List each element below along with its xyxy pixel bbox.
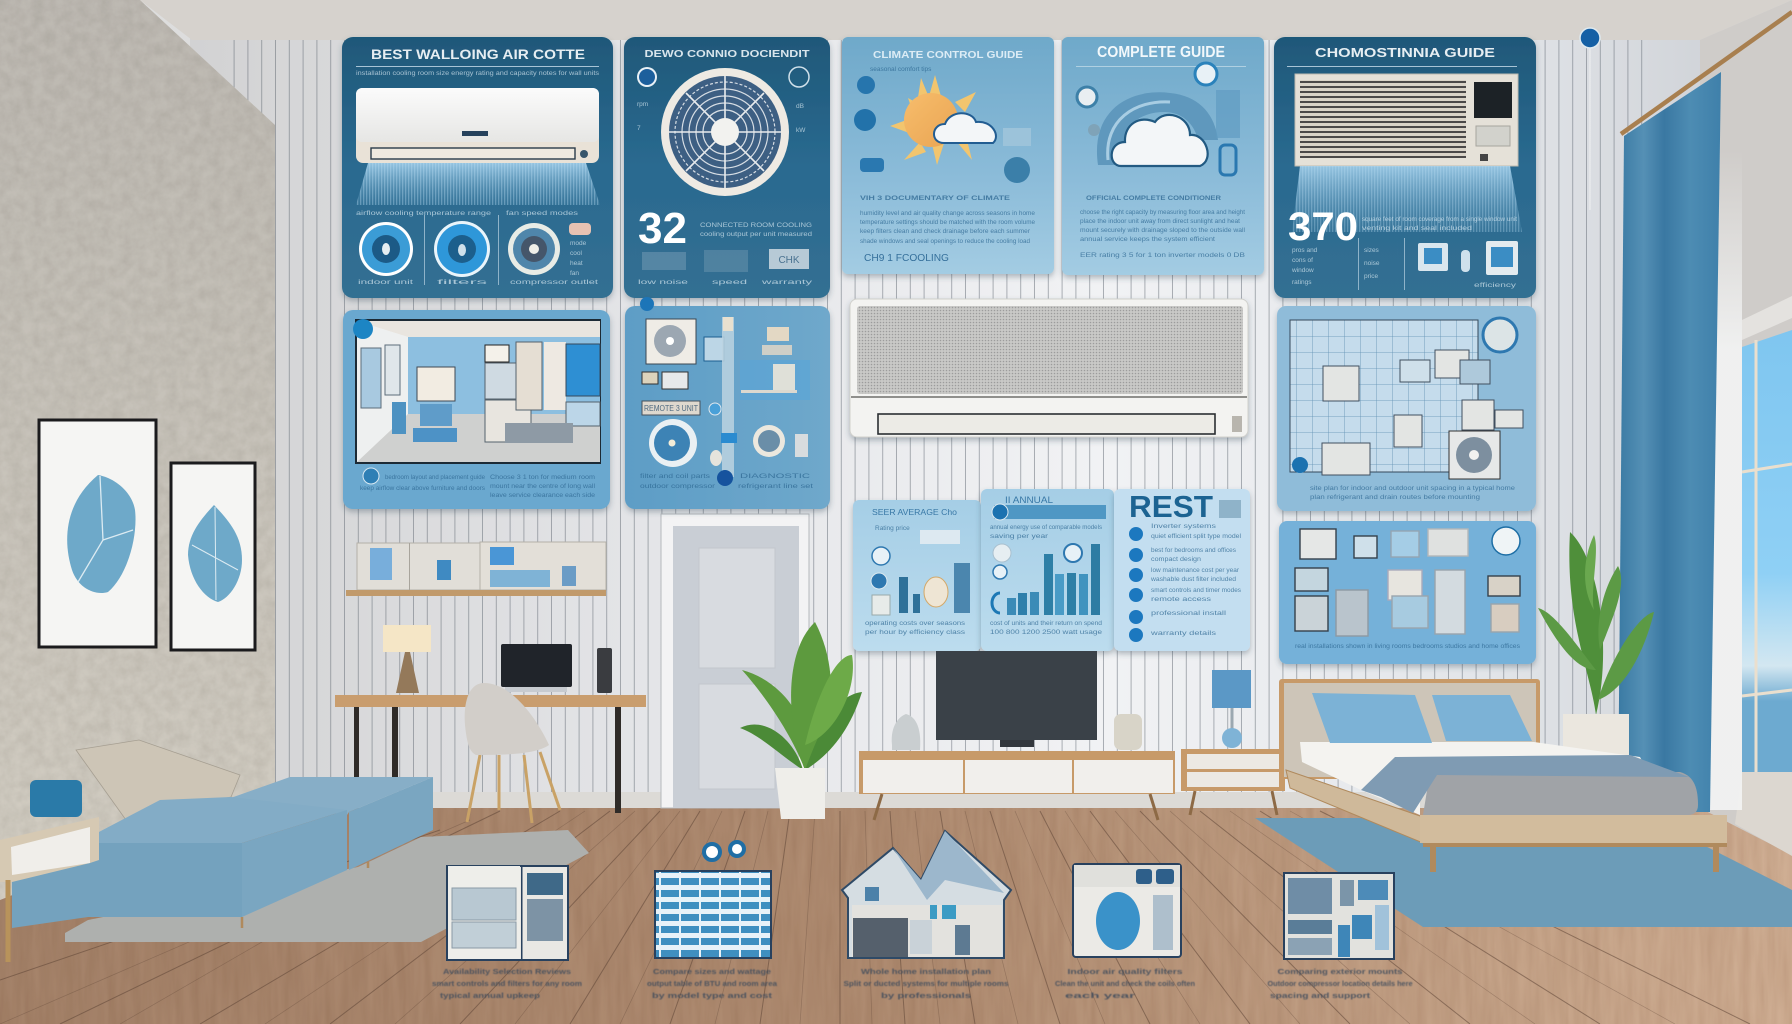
icon: split AC unit — [356, 88, 599, 163]
panel: wall AC guide: airflow cooling temperature range — [356, 210, 492, 217]
panel: wall AC guide: cool — [570, 250, 582, 257]
heading: CLIMATE CONTROL GUIDE — [873, 49, 1023, 61]
panel: wall AC guide: mode — [570, 240, 587, 247]
panel: REST checklist: compact design — [1151, 556, 1201, 563]
ceiling — [140, 0, 1792, 40]
panel: wall AC guide: heat — [570, 260, 583, 267]
panel: bar chart right: 100 800 1200 2500 watt usage — [990, 629, 1102, 636]
panel: wall AC guide — [342, 37, 613, 298]
table lamp — [383, 625, 431, 693]
panel: room layout — [343, 310, 610, 509]
icon: round fan — [649, 419, 697, 467]
panel: bar chart right: annual energy use of comparable models — [990, 524, 1103, 531]
panel: climate guide: shade windows and seal openings to reduce the cooling load — [860, 238, 1030, 245]
icon: fan — [661, 68, 789, 196]
panel: window unit guide: venting kit and seal included — [1362, 225, 1473, 232]
panel: window unit guide: ratings — [1292, 279, 1312, 286]
icon: top badge — [640, 297, 654, 311]
bar chart — [1007, 544, 1100, 615]
caption 3: Split or ducted systems for multiple rooms — [844, 979, 1008, 988]
panel: room layout: mount near the centre of long wall — [490, 483, 596, 490]
main wall AC unit — [850, 299, 1248, 437]
icon: dot — [1292, 457, 1308, 473]
checklist bullets — [1129, 527, 1143, 642]
right rug — [1255, 818, 1792, 927]
panel: REST checklist: low maintenance cost per year — [1151, 567, 1240, 574]
heading: II ANNUAL — [1005, 495, 1053, 505]
caption 2 — [647, 967, 778, 1000]
panel: REST checklist: remote access — [1151, 596, 1212, 603]
airflow — [356, 163, 600, 205]
panel: components: outdoor compressor — [640, 483, 716, 490]
panel: window unit guide: noise — [1364, 260, 1380, 267]
panel: window unit guide — [1274, 37, 1536, 298]
panel: room layout: keep airflow clear above furniture and doors — [360, 485, 486, 492]
panel: complete guide: choose the right capacity by measuring floor area and height — [1080, 209, 1245, 216]
floor icon: washer unit — [1073, 864, 1181, 957]
stat: 32: 32 — [638, 204, 687, 253]
panel: wall AC guide: compressor outlet — [510, 279, 598, 286]
room sketch — [356, 320, 600, 463]
caption 1: Availability Selection Reviews — [443, 967, 571, 976]
icon: round gauge — [753, 425, 785, 457]
panel: climate guide: keep filters clean and check drainage before each summer — [860, 228, 1031, 235]
icon: sun and cloud — [890, 75, 996, 165]
speaker — [597, 648, 612, 693]
panel: blueprint: plan refrigerant and drain routes before mounting — [1310, 494, 1480, 501]
gallery thumbnails — [1295, 529, 1520, 636]
panel: fan guide: cooling output per unit measured — [700, 231, 812, 238]
panel: wall AC guide: fan — [570, 270, 579, 277]
sofa — [12, 740, 433, 928]
panel: fan guide: rpm — [637, 101, 648, 108]
panel: window unit guide: price — [1364, 273, 1378, 280]
panel: fan guide: kW — [796, 127, 806, 134]
panel: fan guide: dB — [796, 103, 804, 110]
panel: REST checklist: professional install — [1151, 610, 1227, 617]
caption 3: Whole home installation plan — [861, 967, 992, 976]
panel: REST checklist: best for bedrooms and offices — [1151, 547, 1237, 554]
center plant — [740, 622, 862, 819]
panel: REST checklist: warranty details — [1150, 630, 1217, 637]
heading: SEER AVERAGE Cho — [872, 508, 958, 517]
floor icon: house — [842, 831, 1011, 958]
icon: chart badge — [924, 577, 948, 607]
panel: window unit guide: cons of — [1292, 257, 1313, 264]
right plant — [1538, 532, 1654, 755]
wall art: right picture — [171, 463, 255, 650]
icon: left badges — [854, 76, 884, 172]
panel: window unit guide: pros and — [1292, 247, 1318, 254]
caption 4: Indoor air quality filters — [1068, 967, 1182, 976]
panel: fan guide: speed — [712, 279, 748, 286]
icon: dial 3 — [508, 223, 560, 275]
icon: window AC — [1295, 74, 1518, 166]
caption 5: Outdoor compressor location details here — [1268, 979, 1412, 988]
panel: REST checklist — [1114, 489, 1250, 651]
caption 2: Compare sizes and wattage — [653, 967, 771, 976]
curtain rod — [1621, 12, 1792, 134]
caption 2: output table of BTU and room area — [647, 979, 778, 988]
panel: components: DIAGNOSTIC — [740, 473, 811, 480]
panel: climate guide: humidity level and air quality change across seasons in home — [860, 210, 1035, 217]
panel: photo gallery — [1279, 521, 1536, 664]
curtain — [1618, 72, 1721, 812]
shelf with boxes — [346, 542, 606, 596]
icon: label 2 — [1486, 241, 1518, 275]
icon: square fan — [1449, 431, 1500, 479]
caption 5: Comparing exterior mounts — [1278, 967, 1402, 976]
blue object — [30, 780, 82, 817]
panel: wall AC guide: indoor unit — [358, 279, 413, 286]
panel: window unit guide: efficiency — [1474, 282, 1517, 289]
panel: wall AC guide: fan speed modes — [506, 210, 579, 217]
caption 1: smart controls and filters for any room — [432, 979, 582, 988]
TV console — [859, 751, 1175, 820]
icon: badge right — [789, 67, 809, 87]
panel: wall AC guide: installation cooling room size energy rating and capacity notes for wall units — [356, 70, 600, 77]
icon: badge — [1492, 527, 1520, 555]
icon: blue dot — [717, 470, 733, 486]
wall art: left picture — [39, 420, 156, 647]
window — [1735, 296, 1792, 856]
heading: REST — [1129, 489, 1213, 524]
side table — [0, 817, 99, 962]
panel: complete guide: OFFICIAL COMPLETE CONDITIONER — [1086, 195, 1221, 202]
panel: complete guide: place the indoor unit away from direct sunlight and heat — [1080, 218, 1240, 225]
panel: window unit guide: sizes — [1364, 247, 1380, 254]
panel: REST checklist: quiet efficient split type model — [1151, 533, 1242, 540]
caption 4: Clean the unit and check the coils often — [1055, 979, 1195, 988]
chair — [465, 683, 560, 823]
icon: small label: CHK — [778, 255, 800, 266]
panel: window unit guide: square feet of room coverage from a single window unit — [1362, 216, 1517, 223]
panel: complete guide: EER rating 3 5 for 1 ton inverter models 0 DB — [1080, 252, 1245, 259]
laptop — [501, 644, 572, 692]
icon: square fan — [646, 319, 696, 364]
icon: dial — [1483, 318, 1517, 352]
panel: room layout: Choose 3 1 ton for medium room — [490, 474, 595, 481]
panel: window unit guide: window — [1291, 267, 1314, 274]
airflow — [1292, 166, 1522, 232]
caption 1 — [432, 967, 582, 1000]
TV — [936, 651, 1097, 747]
panel: climate guide: CH9 1 FCOOLING — [864, 253, 949, 264]
heading: CHOMOSTINNIA GUIDE — [1315, 45, 1495, 60]
left rug — [65, 830, 589, 942]
panel: fan guide: low noise — [638, 279, 689, 286]
desk — [335, 695, 646, 813]
floor icon: building — [1284, 873, 1394, 959]
panel: REST checklist: washable dust filter included — [1150, 576, 1236, 583]
sheer curtain — [1708, 150, 1742, 810]
panel: bar chart left: Rating price — [875, 525, 910, 532]
panel: fan guide: CONNECTED ROOM COOLING — [700, 222, 812, 229]
caption 4: each year — [1065, 991, 1135, 1000]
floor icon: table — [655, 842, 771, 958]
panel: components: refrigerant line set — [738, 483, 813, 490]
caption 4 — [1055, 967, 1195, 1000]
heading: COMPLETE GUIDE — [1097, 44, 1225, 61]
floor plan grid — [1290, 320, 1478, 472]
caption 3: by professionals — [881, 991, 971, 1000]
panel: complete guide — [1062, 37, 1264, 275]
panel: fan guide: warranty — [760, 279, 813, 286]
panel: complete guide: annual service keeps the system efficient — [1080, 236, 1215, 243]
panel: fan guide — [624, 37, 830, 298]
panel: components: REMOTE 3 UNIT — [644, 404, 698, 413]
decor vase left — [892, 714, 920, 750]
icon: small label — [769, 249, 809, 269]
icon: badge left — [637, 67, 657, 87]
panel: room layout: bedroom layout and placement guide — [385, 474, 485, 481]
decor vase right — [1114, 714, 1142, 750]
panel: fan guide: 7 — [637, 125, 641, 132]
icon: badges — [1077, 63, 1236, 175]
icon: top badge — [1580, 28, 1600, 210]
door — [661, 514, 809, 808]
panel: wall AC guide: filters — [437, 279, 489, 286]
panel: climate guide: temperature settings should be matched with the room volume — [860, 219, 1035, 226]
left plaster wall — [0, 0, 275, 900]
icon: arc and cloud — [1097, 92, 1218, 166]
panel: bar chart left — [853, 500, 981, 651]
icon: label 1 — [1418, 243, 1448, 271]
panel: photo gallery: real installations shown in living rooms bedrooms studios and home offices — [1295, 643, 1521, 650]
panel: REST checklist: Inverter systems — [1151, 523, 1217, 530]
wood floor — [0, 790, 1792, 1024]
icon: right badge — [1004, 157, 1030, 183]
heading: DEWO CONNIO DOCIENDIT — [644, 48, 810, 60]
panel: bar chart right: saving per year — [990, 533, 1049, 540]
stat: 370: 370 — [1288, 205, 1358, 249]
panel: REST checklist: smart controls and timer modes — [1151, 587, 1242, 594]
back wall — [190, 30, 1720, 820]
panel: components: filter and coil parts — [640, 473, 711, 480]
caption 3 — [844, 967, 1008, 1000]
panel: climate guide: seasonal comfort tips — [870, 66, 932, 73]
panel: room layout: leave service clearance each side — [490, 492, 595, 499]
blue lamp — [1212, 670, 1251, 748]
heading: BEST WALLOING AIR COTTE — [371, 46, 585, 62]
panel: climate guide — [842, 37, 1054, 274]
panel: climate guide: VIH 3 DOCUMENTARY OF CLIMATE — [860, 195, 1011, 202]
icon: caption badge — [363, 468, 379, 484]
panel: bar chart right — [981, 489, 1114, 651]
panel: blueprint: site plan for indoor and outdoor unit spacing in a typical home — [1310, 485, 1515, 492]
floor icon: dashboard — [447, 866, 568, 960]
panel: components — [625, 297, 830, 509]
panel: bar chart left: per hour by efficiency class — [865, 629, 966, 636]
panel: bar chart left: operating costs over seasons — [865, 620, 966, 627]
nightstand — [1181, 749, 1285, 815]
panel: bar chart right: cost of units and their return on spend — [990, 620, 1102, 627]
bars — [899, 563, 970, 613]
panel: complete guide: mount securely with drainage sloped to the outside wall — [1080, 227, 1246, 234]
bed — [1279, 679, 1727, 872]
caption 1: typical annual upkeep — [440, 991, 541, 1000]
caption 5: spacing and support — [1270, 991, 1371, 1000]
panel: blueprint — [1277, 306, 1536, 511]
icon: dial 2 — [434, 221, 490, 277]
right side wall — [1700, 0, 1792, 860]
icon: dial 1 — [359, 222, 413, 276]
caption 5 — [1268, 967, 1412, 1000]
caption 2: by model type and cost — [652, 991, 773, 1000]
icon: corner badge — [353, 319, 373, 339]
